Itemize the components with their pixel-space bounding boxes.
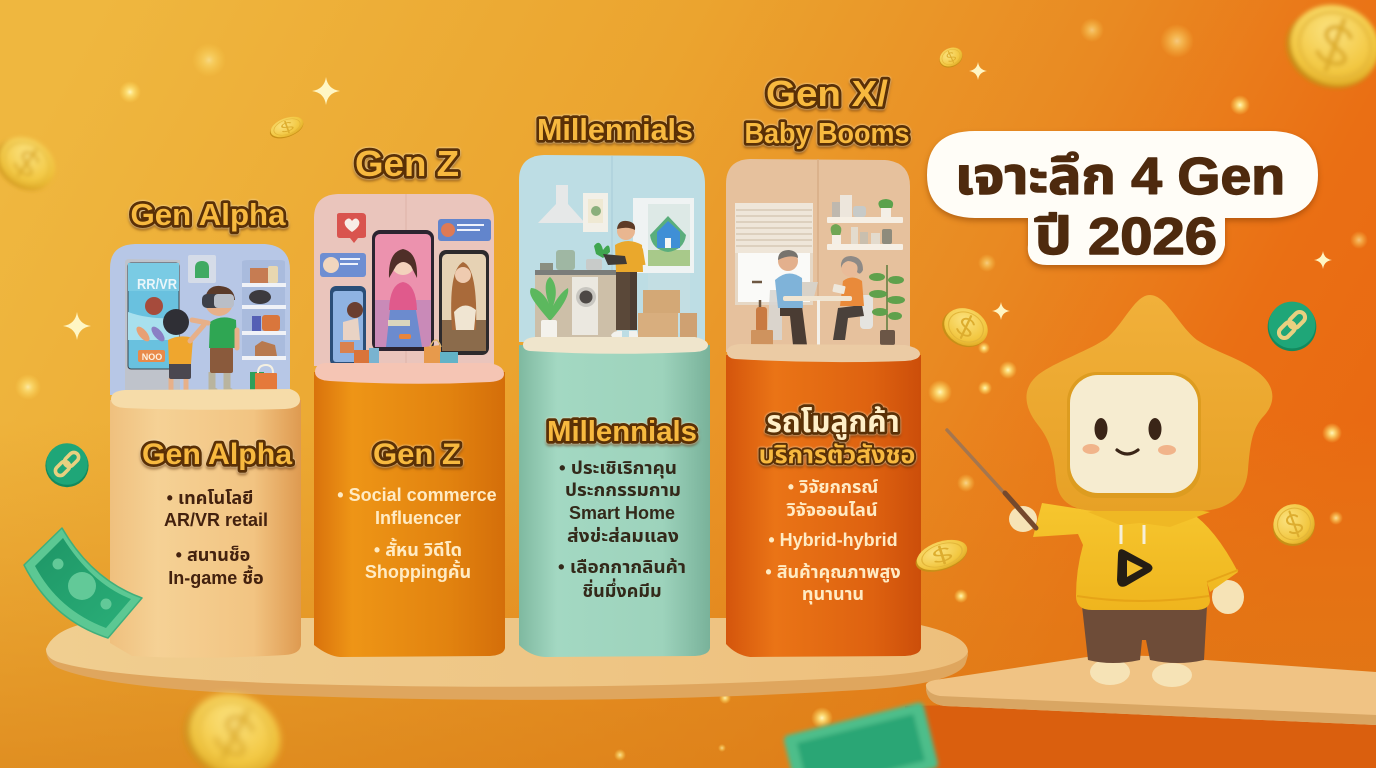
- label: Gen Alpha body: Gen Alpha: [142, 438, 292, 471]
- title line 2: ปี 2026: [1034, 208, 1217, 266]
- pointer stick: [947, 430, 1036, 528]
- column: Millennials: [519, 112, 710, 657]
- body: Gen X: [726, 355, 921, 657]
- bullets: Millennials: • เลือกกากลินค้า: [558, 557, 686, 577]
- label: Gen Alpha top: Gen Alpha: [130, 197, 286, 232]
- bullets: Gen X: • สินค้าคุณภาพสูง: [765, 562, 901, 583]
- label: Millennials top: Millennials: [537, 112, 693, 147]
- bullets: Gen Alpha: • สนานช็อ: [176, 545, 250, 565]
- face: [1067, 372, 1201, 498]
- hoodie: [1033, 503, 1244, 614]
- label: Millennials body: Millennials: [547, 416, 697, 448]
- title pills: [927, 131, 1318, 265]
- bullets: Gen X: [765, 477, 901, 605]
- scene: smart home: [519, 155, 705, 342]
- bullets: Gen Z: Influencer: [375, 508, 461, 528]
- label: body heading 2: บริการตัวสังชอ: [759, 441, 915, 469]
- title card: [927, 131, 1318, 266]
- bullets: Gen Z: [337, 485, 497, 582]
- bullets: Gen X: วิจัจออนไลน์: [786, 500, 877, 520]
- right mascot stage: [905, 656, 1376, 768]
- column: Gen X / Baby Boomers: [726, 73, 921, 657]
- bullets: Gen X: ทุนานาน: [802, 584, 864, 605]
- label: Gen Z top: Gen Z: [355, 143, 459, 184]
- label: body heading 1: รถโมลูกค้า: [766, 406, 900, 440]
- mascot: [947, 295, 1272, 687]
- pointing hand: [1005, 493, 1037, 532]
- bullets: Gen X: • Hybrid-hybrid: [768, 530, 898, 550]
- bullets: Gen Z: • สั้หน วิดีโด: [374, 538, 462, 560]
- main podium: [46, 618, 968, 700]
- cash note: [24, 528, 142, 638]
- bullets: Millennials: ส่งข่ะส่ลมแลง: [567, 526, 679, 546]
- bullets: Millennials: ประกกรรมกาม: [565, 480, 681, 500]
- bullets: Millennials: Smart Home: [569, 503, 675, 523]
- bullets: Gen X: • วิจัยกกรณ์: [788, 477, 878, 497]
- plate: [315, 363, 504, 384]
- plate: [523, 337, 708, 354]
- scene: AR/VR retail: [110, 244, 290, 398]
- bullets: Gen Alpha: In-game ชื้อ: [168, 565, 264, 588]
- body: Gen Alpha: [110, 400, 301, 658]
- scene: home office couple: [726, 159, 910, 352]
- bullets: Millennials: • ประเชิเริกาคุน: [559, 458, 677, 479]
- bullets: Gen Alpha: AR/VR retail: [164, 510, 268, 530]
- bullets: Gen Z: Shoppingคั้น: [365, 560, 471, 582]
- title line 1: เจาะลึก 4 Gen: [955, 148, 1285, 206]
- link badges: [45, 302, 1316, 487]
- label: Gen X top: Gen X/: [766, 73, 888, 114]
- column: Gen Z: [314, 143, 505, 657]
- scene: live commerce: [314, 194, 494, 370]
- body: Gen Z: [314, 372, 505, 657]
- bullets: Gen Alpha: • เทคโนโลยี: [167, 488, 253, 508]
- legs and shorts: [1082, 606, 1207, 687]
- coins: [267, 44, 1321, 578]
- blurred cash note: [783, 701, 939, 768]
- star head: [1026, 295, 1272, 511]
- bullets: Millennials: [558, 458, 686, 601]
- sparkles: [63, 62, 1332, 340]
- scene: AR/VR retail: NOO: [142, 352, 162, 362]
- label: Baby Booms top: Baby Booms: [744, 118, 910, 150]
- scene: AR/VR retail: RR/VR: [137, 276, 177, 293]
- column: Gen Alpha: [110, 197, 301, 658]
- label: Gen Z body: Gen Z: [373, 438, 461, 471]
- plate: [111, 389, 300, 410]
- bullets: Millennials: ชิ่นมึ่งคมีม: [582, 578, 662, 601]
- plate: [727, 344, 920, 362]
- bullets: Gen Z: • Social commerce: [337, 485, 497, 505]
- bullets: Gen Alpha: [164, 488, 268, 588]
- body: Millennials: [519, 345, 710, 657]
